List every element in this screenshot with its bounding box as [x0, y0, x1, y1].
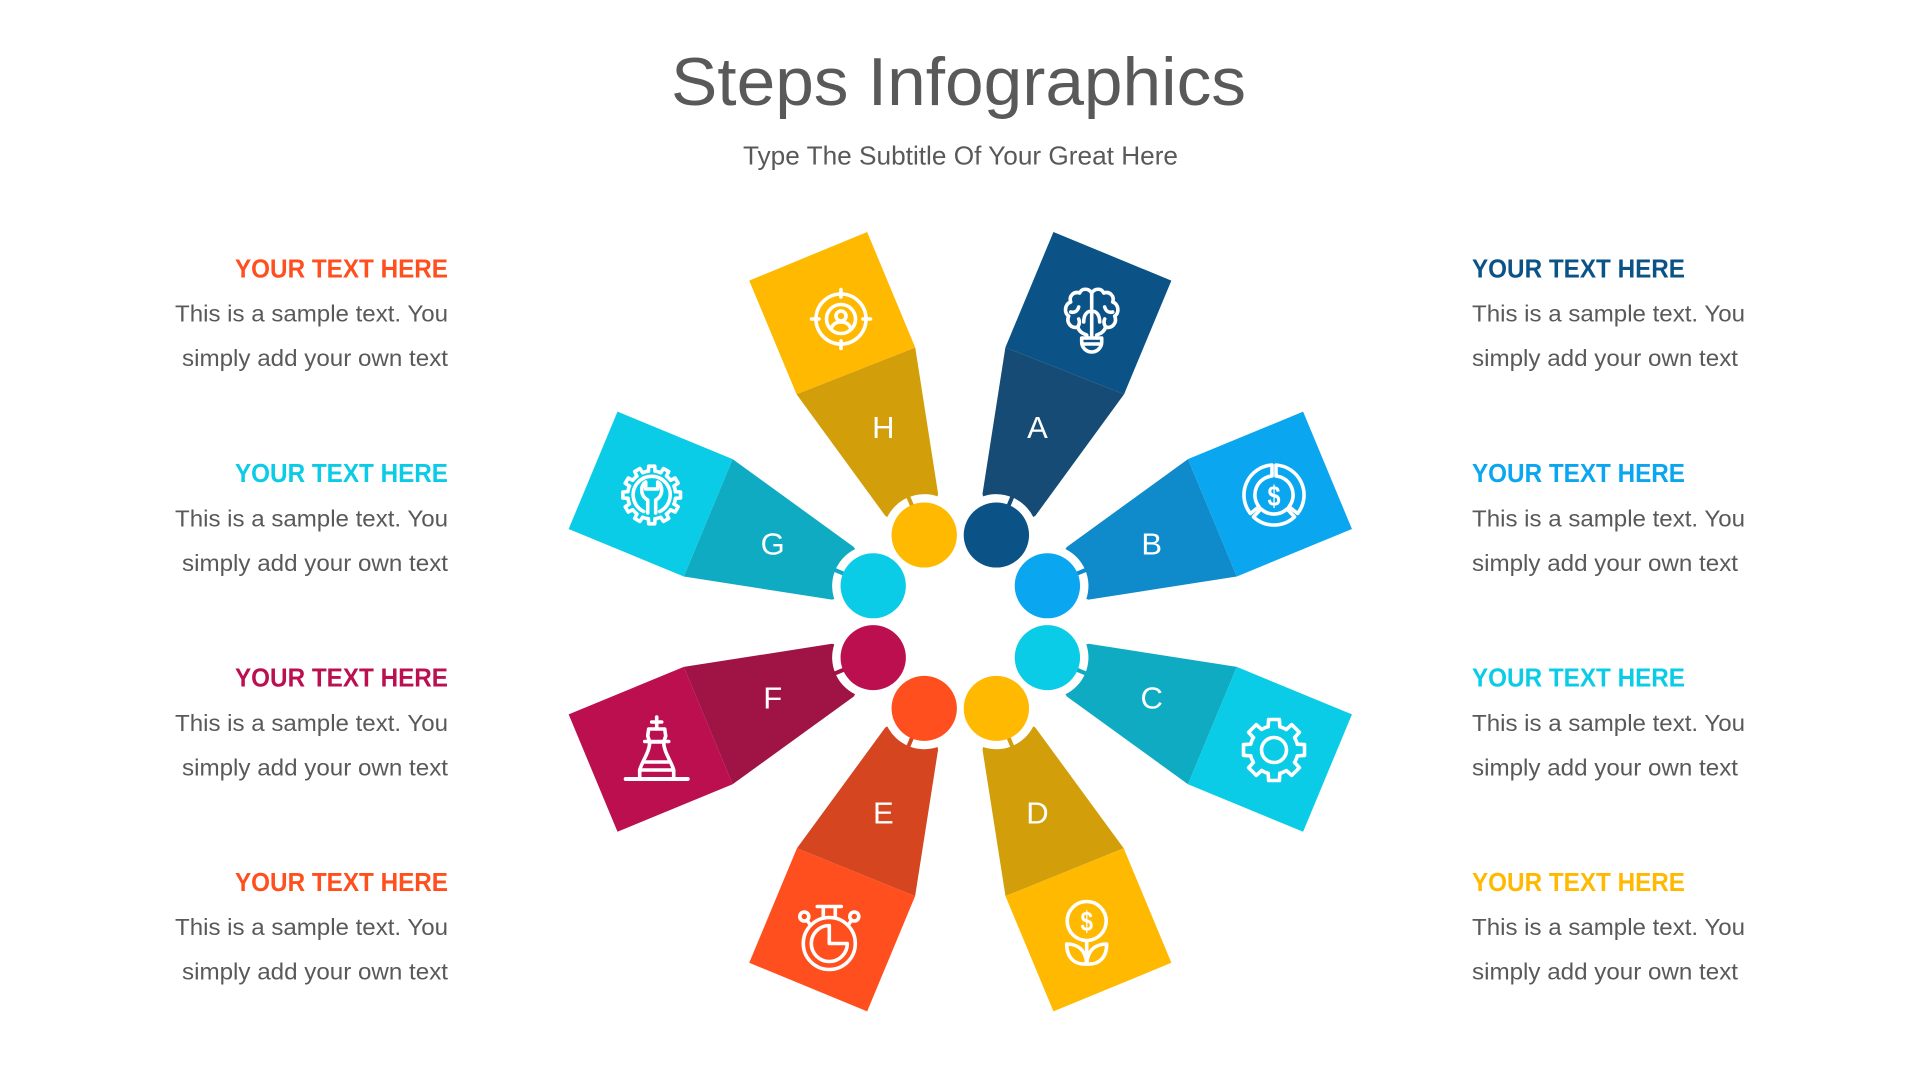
step D [925, 654, 1171, 1011]
icon: dollar segments: $ [1268, 481, 1280, 513]
text block: right row 1: YOUR TEXT HERE [1472, 256, 1685, 284]
text block: left row 1 [175, 256, 448, 371]
letter E: E [873, 796, 894, 830]
text block: left row 4: This is a sample text. You [175, 914, 448, 940]
text block: right row 1 [1472, 256, 1745, 371]
icon: stopwatch [800, 906, 859, 970]
text block: right row 4 [1472, 869, 1745, 984]
text block: left row 2: YOUR TEXT HERE [235, 460, 448, 488]
letter A: A [1027, 410, 1048, 445]
text block: left row 4: simply add your own text [182, 958, 448, 984]
text block: right row 4: simply add your own text [1472, 958, 1738, 984]
icon: chess king [626, 717, 688, 779]
text block: right row 3 [1472, 665, 1745, 780]
petal B [993, 412, 1352, 657]
icon: money plant [1067, 902, 1107, 964]
petal E [749, 654, 996, 1011]
step C [993, 586, 1352, 832]
text block: left row 4 [175, 869, 448, 984]
text block: right row 2: simply add your own text [1472, 550, 1738, 576]
text block: left row 2 [175, 460, 448, 576]
petal D [925, 654, 1171, 1011]
step E [749, 654, 996, 1011]
icon: brain with bulb [1065, 289, 1118, 352]
petal G [569, 412, 928, 657]
step G [569, 412, 928, 657]
petal C [993, 586, 1352, 832]
letter B: B [1141, 526, 1162, 562]
icon: target person [812, 290, 870, 348]
text block: left row 2: This is a sample text. You [175, 506, 448, 532]
icon: money plant: $ [1080, 906, 1093, 937]
petal A [925, 232, 1171, 589]
text block: right row 3: YOUR TEXT HERE [1472, 665, 1685, 693]
icon: gear [1244, 720, 1304, 780]
text block: right row 2: This is a sample text. You [1472, 506, 1745, 532]
icon: dollar segments [1244, 465, 1304, 525]
step F [569, 586, 928, 832]
petal F [569, 586, 928, 832]
text block: right row 1: This is a sample text. You [1472, 301, 1745, 327]
text block: left row 3: This is a sample text. You [175, 710, 448, 736]
text block: right row 3: This is a sample text. You [1472, 710, 1745, 736]
text block: left row 1: simply add your own text [182, 345, 448, 371]
text block: left row 2: simply add your own text [182, 550, 448, 576]
letter C: C [1141, 680, 1163, 716]
text block: left row 1: YOUR TEXT HERE [235, 256, 448, 284]
step H [749, 232, 996, 589]
text block: left row 3 [175, 665, 448, 780]
text block: right row 2: YOUR TEXT HERE [1472, 460, 1685, 488]
step A [925, 232, 1171, 589]
title: Steps Infographics [671, 44, 1246, 120]
icon: gear with wrench [622, 466, 681, 524]
petal H [749, 232, 996, 589]
text block: right row 3: simply add your own text [1472, 754, 1738, 780]
letter D: D [1026, 796, 1049, 830]
text block: left row 3: simply add your own text [182, 754, 448, 780]
text block: left row 4: YOUR TEXT HERE [235, 869, 448, 897]
subtitle: Type The Subtitle Of Your Great Here [743, 140, 1178, 170]
letter F: F [763, 680, 782, 716]
step B [993, 412, 1352, 657]
text block: left row 3: YOUR TEXT HERE [235, 665, 448, 693]
text block: left row 1: This is a sample text. You [175, 301, 448, 327]
letter G: G [761, 526, 785, 562]
text block: right row 2 [1472, 460, 1745, 576]
letter H: H [872, 410, 894, 445]
text block: right row 1: simply add your own text [1472, 345, 1738, 371]
text block: right row 4: YOUR TEXT HERE [1472, 869, 1685, 897]
text block: right row 4: This is a sample text. You [1472, 914, 1745, 940]
